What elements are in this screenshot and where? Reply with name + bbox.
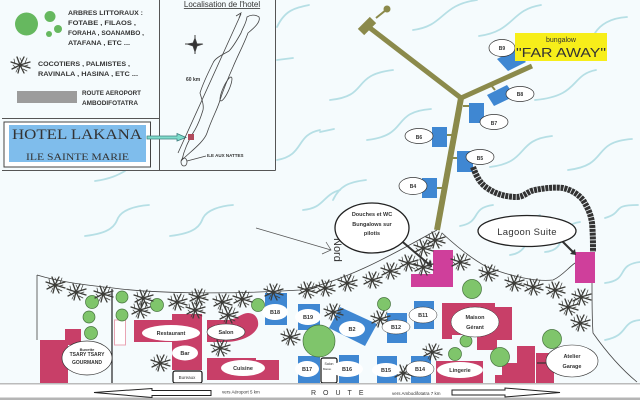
road label left: vers Aéroport 5 km (222, 390, 260, 394)
callout: showers (335, 203, 432, 267)
north arrow (256, 228, 343, 262)
water waves (85, 0, 640, 340)
Bureaux: Bureaux (179, 375, 196, 380)
ile aux nattes label: ILE AUX NATTES (207, 153, 244, 158)
Restaurant (142, 325, 200, 341)
Bureaux (173, 371, 202, 383)
legend text: road: ROUTE AEROPORT (82, 91, 141, 97)
Salon massage: Salon (325, 362, 334, 366)
B8 (506, 86, 534, 102)
Salon: Salon (219, 330, 234, 336)
callout: Lagoon Suite: Lagoon Suite (497, 227, 557, 238)
Tsary Tsary Gourmand: Buvette (80, 347, 95, 352)
B12 (382, 320, 410, 334)
ground bungalows (265, 293, 434, 383)
B17 (295, 361, 319, 377)
jetty (361, 6, 532, 230)
road (0, 383, 640, 400)
B12: B12 (391, 325, 401, 331)
Atelier Garage: Garage (563, 364, 581, 370)
B15 (372, 363, 400, 377)
callout: Far Away: bungalow (546, 37, 577, 44)
B9 (489, 40, 515, 56)
Maison Gerant: Gérant (466, 325, 484, 331)
legend text: littoral trees: ARBRES LITTORAUX : (68, 10, 143, 17)
Cuisine: Cuisine (233, 366, 253, 372)
palm trees (46, 232, 591, 381)
B2 (339, 321, 365, 337)
panel frames (2, 0, 276, 170)
legend text: road (82, 91, 141, 107)
legend text: palms: RAVINALA , HASINA , ETC ... (38, 71, 138, 78)
B19: B19 (303, 315, 313, 321)
lagoon suite walkway (473, 167, 593, 252)
B16: B16 (342, 367, 352, 373)
overwater bungalows (422, 50, 526, 198)
Atelier Garage: Atelier (563, 354, 581, 360)
Bar: Bar (180, 351, 190, 357)
B18: B18 (270, 310, 280, 316)
road label: ROUTE (311, 390, 370, 397)
Bar (172, 346, 198, 360)
white courtyard (114, 320, 126, 345)
Tsary Tsary Gourmand: GOURMAND (72, 360, 102, 366)
garden wall (111, 289, 113, 384)
B15: B15 (381, 368, 391, 374)
B5 (466, 150, 494, 164)
arrow right (452, 388, 560, 397)
Maison Gerant: Maison (466, 315, 485, 321)
callout: Far Away (515, 33, 607, 61)
distance line (178, 13, 241, 153)
callout: showers: pilotis (364, 231, 380, 237)
B7 (480, 114, 508, 130)
B7: B7 (491, 121, 497, 127)
shoreline (37, 230, 637, 382)
icon: littoral trees (15, 11, 62, 37)
hotel marker (188, 134, 194, 140)
B8: B8 (517, 92, 523, 98)
B11 (409, 307, 437, 323)
arrow left (94, 388, 211, 398)
road label right: vers Ambodifotatra 7 km (392, 391, 441, 396)
location map (178, 0, 260, 166)
callout: showers: Bungalows sur (352, 222, 393, 228)
ile aux nattes (181, 158, 187, 166)
B11: B11 (418, 313, 428, 319)
legend text: palms (38, 61, 138, 78)
B14: B14 (415, 367, 426, 373)
callout: showers: Douches et WC (352, 212, 392, 218)
B19 (295, 309, 321, 325)
legend text: littoral trees: FOTABE , FILAOS , (68, 20, 136, 27)
map title: Localisation de l'hotel (184, 0, 260, 9)
B6 (405, 128, 433, 144)
hotel title box (4, 122, 150, 167)
Tsary Tsary Gourmand: TSARY TSARY (70, 352, 105, 358)
B16 (331, 361, 363, 377)
legend text: littoral trees: ATAFANA , ETC ... (68, 40, 130, 47)
legend text: littoral trees (68, 10, 144, 47)
legend text: road: AMBODIFOTATRA (82, 101, 139, 107)
B9: B9 (499, 46, 505, 52)
heading: hotel name: HOTEL LAKANA (12, 127, 143, 143)
Tsary Tsary Gourmand (62, 341, 112, 375)
arrow to hotel location (147, 134, 186, 141)
Salon massage: Massage (323, 367, 335, 371)
B5: B5 (477, 156, 483, 162)
Lingerie: Lingerie (449, 368, 471, 374)
icon: palm legend (11, 57, 30, 73)
B17: B17 (302, 367, 312, 373)
green trees (83, 280, 562, 366)
Restaurant: Restaurant (157, 331, 186, 337)
lagoon (218, 76, 234, 102)
legend text: littoral trees: FORAHA , SOANAMBO , (68, 30, 144, 37)
bungalow labels (399, 40, 534, 194)
pink buildings: showers and lagoon suite (411, 250, 595, 287)
B2: B2 (348, 327, 356, 333)
legend text: palms: COCOTIERS , PALMISTES , (38, 61, 130, 68)
Salon (207, 324, 245, 340)
callout: Far Away: "FAR AWAY" (516, 45, 606, 60)
legend swatch: road (17, 91, 77, 103)
compass (185, 35, 202, 54)
building labels (62, 304, 598, 383)
Lingerie (437, 362, 483, 378)
Salon massage (321, 358, 337, 383)
B14 (406, 361, 434, 377)
B4: B4 (410, 184, 416, 190)
Atelier Garage (537, 345, 598, 377)
B6: B6 (416, 135, 422, 141)
B18 (262, 304, 288, 320)
callout: Lagoon Suite (478, 216, 576, 255)
north label: Nord (331, 238, 343, 262)
island outline (182, 15, 259, 160)
B4 (399, 178, 427, 194)
legend panel (11, 10, 144, 107)
red buildings (40, 303, 554, 383)
Cuisine (221, 360, 265, 376)
Maison Gerant (451, 307, 499, 337)
km label: 60 km (186, 77, 201, 83)
subheading: island: ILE SAINTE MARIE (26, 152, 130, 162)
